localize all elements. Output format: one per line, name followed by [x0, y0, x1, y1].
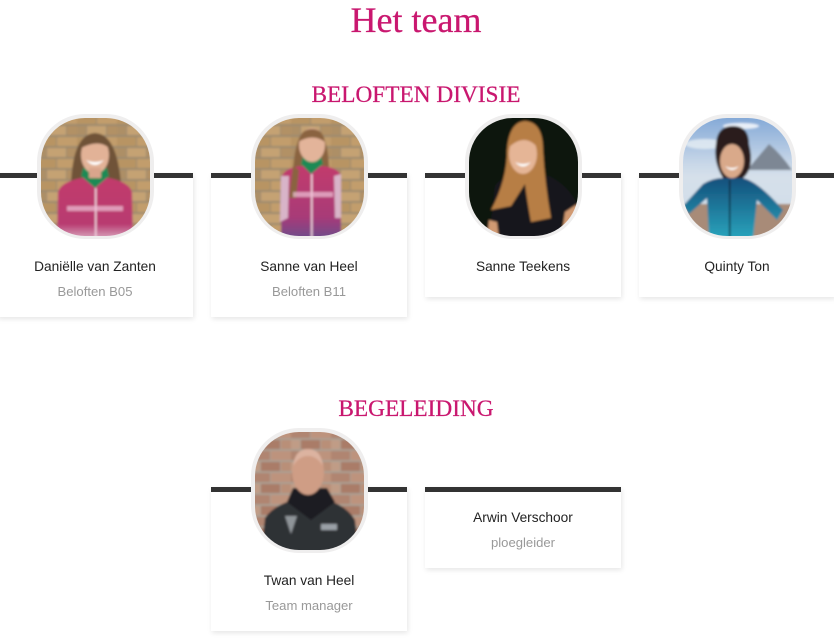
role: Beloften B11: [272, 284, 346, 299]
role: Team manager: [265, 598, 353, 613]
heading: begeleiding: BEGELEIDING: [338, 396, 494, 422]
role: ploegleider: [491, 535, 555, 550]
heading: beloften divisie: BELOFTEN DIVISIE: [311, 82, 520, 108]
card: Daniëlle van Zanten: [0, 173, 193, 317]
name: Daniëlle van Zanten: [34, 259, 156, 274]
portrait: Daniëlle van Zanten: [37, 114, 154, 239]
portrait: Sanne van Heel: [251, 114, 368, 239]
card: Sanne van Heel: [211, 173, 407, 317]
name: Quinty Ton: [704, 259, 770, 274]
card: Sanne Teekens: [425, 173, 621, 297]
card: Quinty Ton: [639, 173, 834, 297]
name: Sanne van Heel: [260, 259, 358, 274]
card: Twan van Heel: [211, 487, 407, 631]
portrait: Twan van Heel: [251, 428, 368, 553]
name: Sanne Teekens: [476, 259, 570, 274]
title: Het team: [351, 0, 481, 40]
portrait: Sanne Teekens: [465, 114, 582, 239]
portrait: Quinty Ton: [679, 114, 796, 239]
card: Arwin Verschoor: [425, 487, 621, 568]
name: Twan van Heel: [264, 573, 354, 588]
name: Arwin Verschoor: [473, 510, 573, 525]
role: Beloften B05: [58, 284, 132, 299]
